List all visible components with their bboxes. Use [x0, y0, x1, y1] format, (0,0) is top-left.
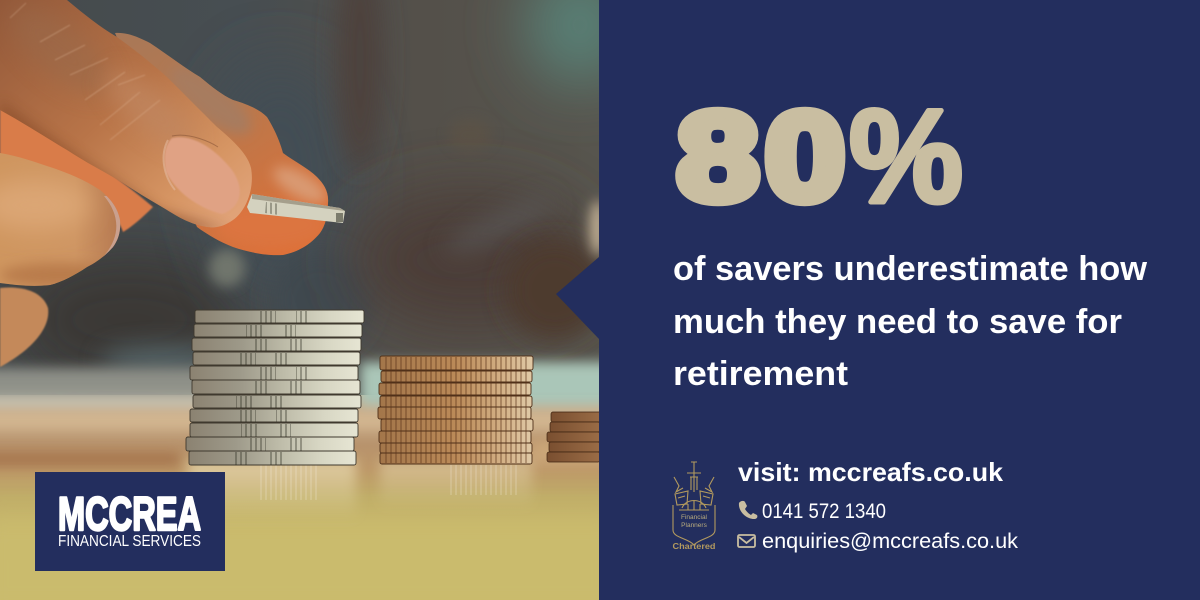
panel: navy text panel with pointer — [556, 0, 1200, 600]
headline statistic: 80% — [677, 83, 963, 231]
silver coin stack — [186, 310, 364, 465]
lower finger — [0, 288, 48, 367]
thumb — [115, 32, 328, 256]
finger wrinkles — [10, 3, 160, 140]
Chartered label: Chartered — [672, 541, 716, 551]
crest wording: Planners — [681, 522, 708, 529]
logo: McCrea Financial Services: MCCREA — [58, 487, 201, 540]
table surface — [0, 362, 620, 600]
coin held in fingers — [247, 194, 345, 223]
coin reflections — [188, 460, 356, 520]
logo: McCrea Financial Services — [35, 472, 225, 571]
index finger — [0, 0, 260, 235]
statement text: of savers underestimate how — [673, 250, 1148, 288]
crest wording: Financial — [681, 514, 708, 521]
email contact: enquiries@mccreafs.co.uk — [762, 529, 1018, 553]
photo background — [0, 0, 635, 400]
palm between fingers — [0, 108, 153, 232]
headline statistic: 80%: 8 — [677, 88, 759, 226]
crest wording — [681, 514, 708, 529]
phone contact: 0141 572 1340 — [762, 499, 886, 523]
hand holding coin — [0, 0, 345, 367]
panel: coin photograph — [0, 0, 635, 600]
icon: Chartered Financial Planners crest — [672, 462, 716, 551]
headline statistic: 80%: 0 — [765, 88, 845, 226]
statement text — [673, 250, 1148, 393]
website link: visit: mccreafs.co.uk — [738, 457, 1004, 487]
icon: phone — [739, 501, 757, 519]
small coin stack — [547, 412, 601, 462]
headline statistic: 80%: % — [849, 83, 963, 231]
statement text: retirement — [673, 355, 848, 393]
middle finger — [0, 150, 125, 290]
fingernail — [165, 137, 240, 214]
copper coin stack — [378, 356, 533, 464]
icon: envelope — [738, 535, 755, 547]
statement text: much they need to save for — [673, 303, 1122, 341]
logo: McCrea Financial Services: FINANCIAL SERVICES — [58, 533, 201, 550]
